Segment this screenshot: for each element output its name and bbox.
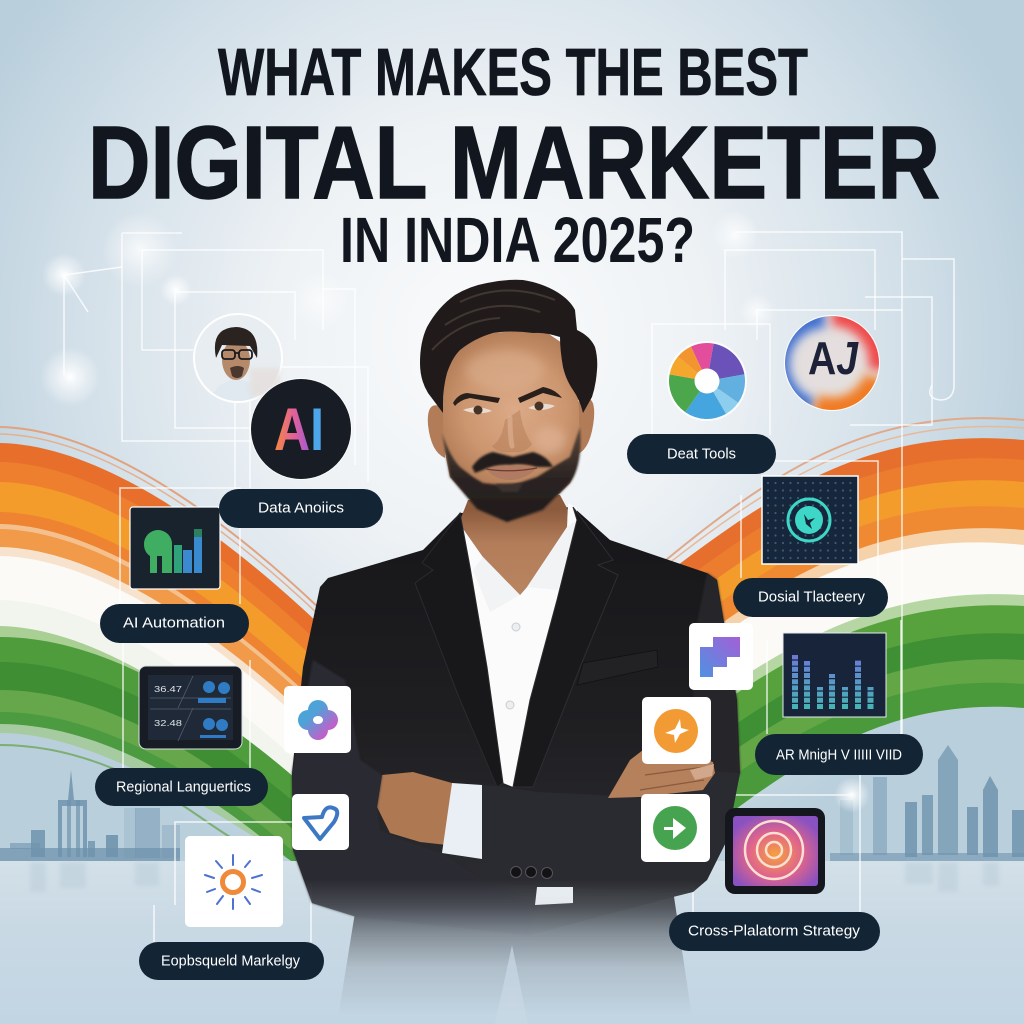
- title: [88, 35, 940, 276]
- crossed sleeve: [482, 770, 740, 892]
- icon: AI badge: [250, 378, 352, 480]
- label: tools: Deat Tools: [667, 446, 736, 462]
- label: AI automation: [100, 604, 249, 643]
- icon: flower tile: [284, 686, 351, 753]
- tablet dials: [198, 681, 230, 738]
- avatar face: [222, 345, 250, 380]
- icon: camera ring tile: [725, 808, 825, 894]
- shirt buttons: [506, 623, 520, 709]
- bulb shape: [144, 530, 172, 573]
- label: bottom-left skill: [139, 942, 324, 980]
- icon: heart arrow tile: [292, 794, 349, 850]
- icon: AJ badge: [779, 315, 880, 411]
- soul patch: [495, 483, 523, 492]
- left lapel: [415, 513, 503, 787]
- neck: [459, 495, 568, 595]
- icon: AJ badge: AJ: [808, 332, 859, 384]
- beard: [442, 427, 581, 522]
- icon: equaliser tile: [783, 633, 886, 717]
- skyline: right: [830, 745, 1024, 863]
- right shoulder sleeve: [694, 572, 742, 776]
- label: social: Dosial Tlacteery: [758, 588, 865, 606]
- icon: target tile: [762, 476, 858, 564]
- icon: stair tile: [689, 623, 753, 690]
- icon: dashboard tablet: 32.48: [154, 719, 183, 728]
- icon: sun tile: [185, 836, 283, 927]
- moustache: [472, 452, 553, 473]
- sleeve buttons: [510, 866, 552, 878]
- title line 3: IN INDIA 2025?: [340, 204, 695, 276]
- left eyebrow: [453, 393, 500, 406]
- lips: [486, 466, 537, 480]
- cuff: [442, 783, 482, 859]
- collar shading: [473, 520, 577, 612]
- icon: AI badge: AI: [274, 396, 324, 463]
- label: AR: AR MnigH V IIIII VIID: [776, 746, 902, 764]
- man in suit with crossed arms: [292, 280, 740, 1024]
- label: data analytics: Data Anoiics: [258, 500, 344, 516]
- label: regional languages: Regional Languertics: [116, 778, 251, 796]
- breast pocket: [577, 650, 658, 685]
- hair: [420, 280, 597, 413]
- water reflections: [30, 862, 999, 892]
- left tricolour wave: [0, 427, 320, 1024]
- water: [0, 861, 1024, 1024]
- bars: [174, 545, 182, 573]
- icon: orange spark tile: [642, 697, 711, 764]
- icon: green arrow tile: [641, 794, 710, 862]
- avatar beard: [230, 366, 244, 378]
- skyline: left: [0, 770, 180, 861]
- title line 1: WHAT MAKES THE BEST: [218, 35, 808, 110]
- label: social: [733, 578, 888, 617]
- right hand: [608, 750, 715, 798]
- right eyebrow: [518, 387, 562, 403]
- shirt: [459, 503, 577, 787]
- label: cross-platform strategy: [669, 912, 880, 951]
- connector frames: right: [652, 232, 954, 912]
- shirt hem: [535, 887, 573, 905]
- label: bottom-left skill: Eopbsqueld Markelgy: [161, 952, 300, 970]
- label: regional languages: [95, 768, 268, 806]
- portrait avatar: [194, 314, 282, 402]
- jacket vent: [495, 945, 528, 1024]
- trousers and jacket skirt: [341, 896, 690, 1001]
- ears: [428, 405, 445, 458]
- avatar shirt: [214, 393, 256, 401]
- label: tools: [627, 434, 776, 474]
- label: data analytics: [219, 489, 383, 528]
- right lapel: [513, 507, 618, 787]
- avatar hair: [215, 327, 257, 358]
- label: cross-platform strategy: Cross-Plalatorm Strategy: [688, 922, 860, 940]
- avatar glasses: [222, 350, 252, 359]
- label: AR: [755, 734, 923, 775]
- nose: [492, 410, 532, 452]
- icon: colour pie: [667, 341, 747, 421]
- left hand: [377, 772, 452, 845]
- eyes: [463, 407, 492, 413]
- left forearm: [290, 661, 384, 918]
- icon: dashboard tablet: [139, 666, 242, 749]
- light flares: [40, 211, 870, 813]
- label: AI automation: AI Automation: [123, 614, 225, 632]
- connector frames: left: [64, 233, 368, 942]
- jacket: [292, 507, 740, 935]
- tablet readouts: 36.47: [154, 685, 183, 694]
- icon: analytics tile: [130, 507, 220, 589]
- right tricolour wave: [620, 418, 1024, 1024]
- face: [443, 328, 580, 520]
- forehead and cheek light: [465, 350, 545, 390]
